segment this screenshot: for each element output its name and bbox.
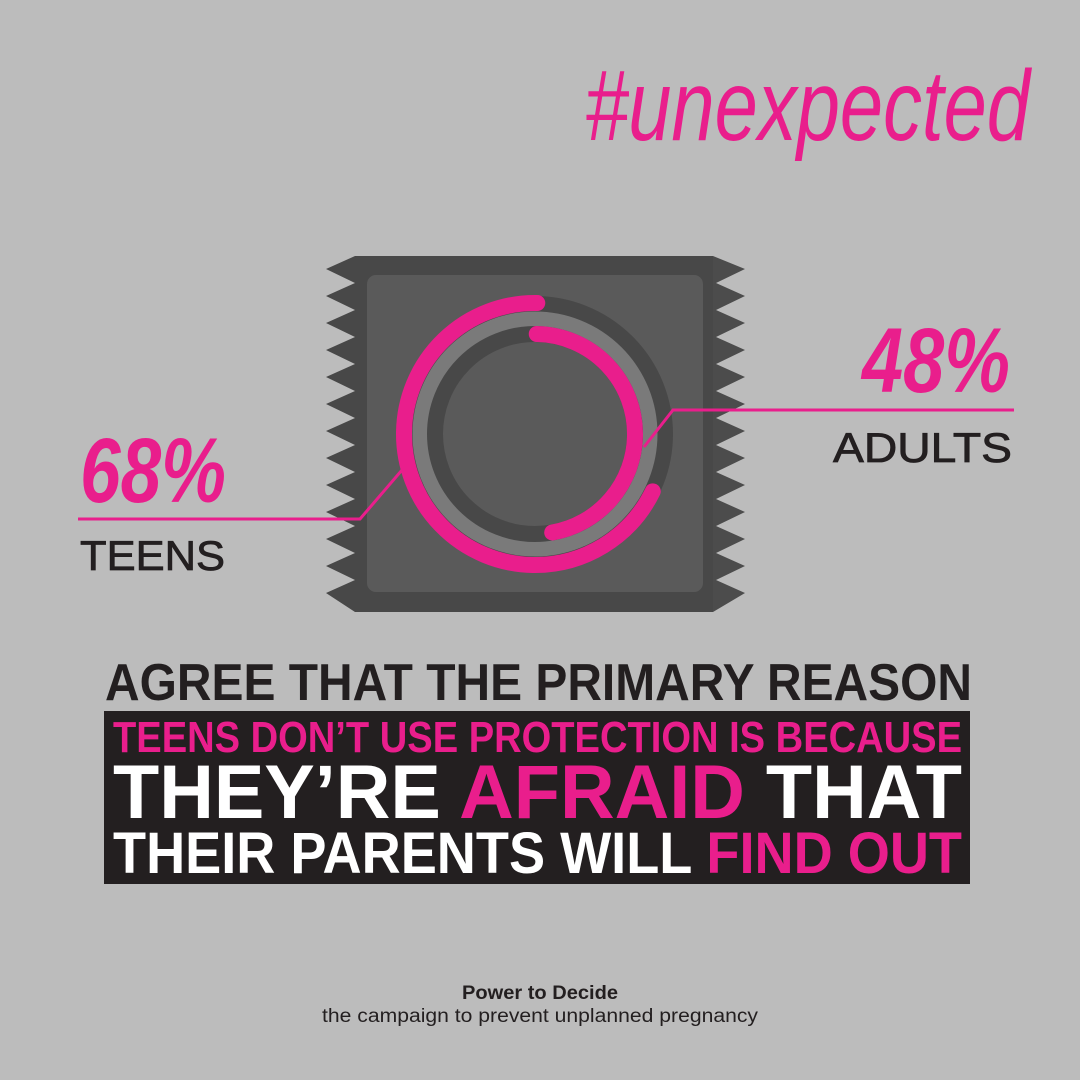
stat: 68% teens: 68% bbox=[80, 420, 226, 522]
footer: the campaign to prevent unplanned pregnancy bbox=[322, 1006, 759, 1027]
callout line: teens bbox=[78, 470, 402, 519]
callout line: adults bbox=[644, 410, 1014, 447]
footer: Power to Decide bbox=[462, 983, 618, 1004]
stat: 68% teens bbox=[80, 420, 226, 579]
stat: 48% adults: 48% bbox=[860, 310, 1010, 412]
footer bbox=[322, 983, 759, 1027]
heading: AGREE THAT THE PRIMARY REASON bbox=[105, 654, 972, 712]
chart: adults ring 48% bbox=[433, 332, 637, 536]
text block: black box: TEENS DON’T USE PROTECTION IS BECAUSE bbox=[113, 713, 962, 762]
text block: black box: THEIR PARENTS WILL FIND OUT bbox=[113, 821, 962, 886]
chart: teens ring 68% bbox=[402, 301, 668, 567]
text block: black box bbox=[104, 711, 970, 886]
icon: condom wrapper bbox=[326, 256, 745, 612]
text block: black box: THEY’RE AFRAID THAT bbox=[113, 750, 962, 835]
stat: 48% adults bbox=[833, 310, 1012, 471]
stat: 48% adults: ADULTS bbox=[833, 424, 1012, 471]
stat: 68% teens: TEENS bbox=[80, 532, 225, 579]
